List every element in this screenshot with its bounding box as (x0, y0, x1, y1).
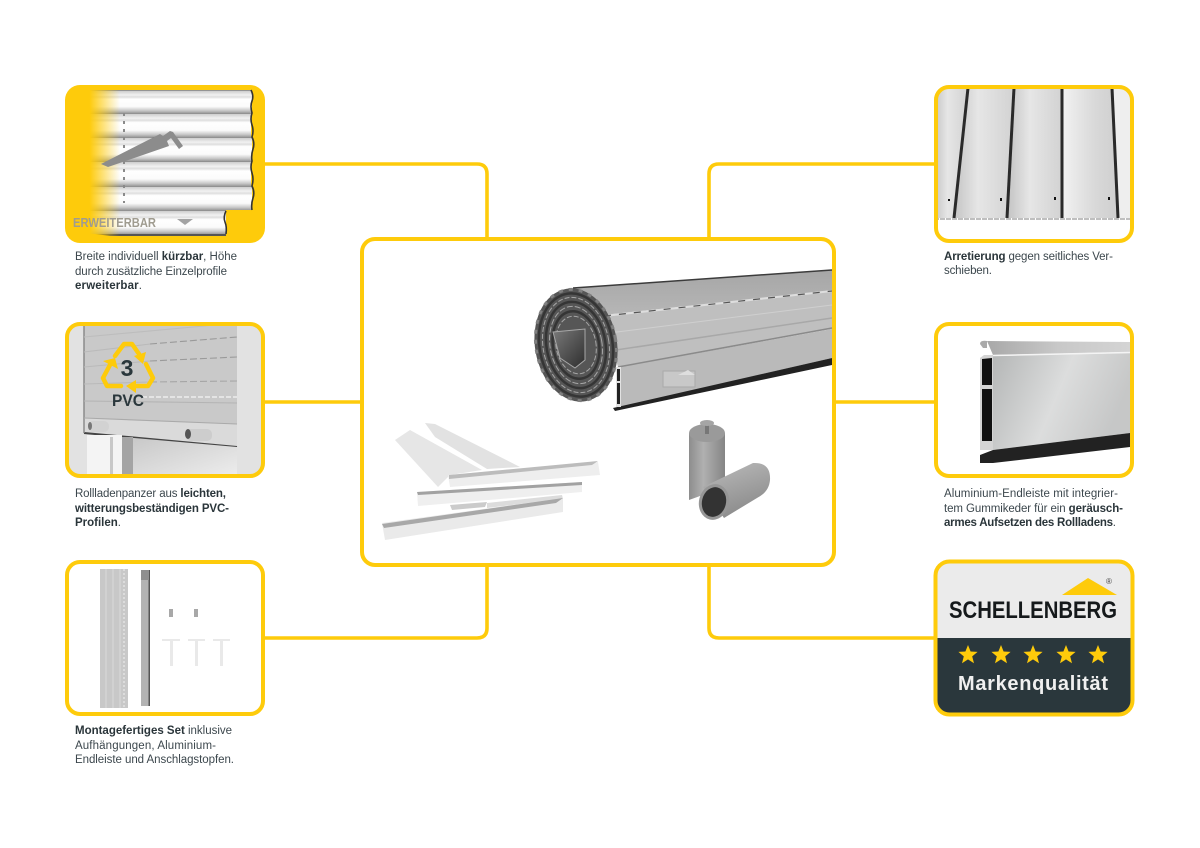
text: mounting set: Montagefertiges Set inklusive (75, 725, 232, 737)
PVC label: PVC (112, 391, 144, 410)
text: mounting set: Endleiste und Anschlagstopfen. (75, 754, 234, 766)
icon: saw (101, 131, 183, 167)
icon: down marker (177, 219, 193, 225)
brackets (382, 423, 600, 540)
text: locking: schieben. (944, 265, 992, 277)
text: locking: Arretierung gegen seitliches Ver- (944, 251, 1113, 263)
panel: mounting set (67, 562, 263, 714)
text: mounting set: Aufhängungen, Aluminium- (75, 740, 216, 752)
logo roof (1062, 578, 1117, 595)
rolled shutter (526, 270, 832, 411)
hangers (162, 639, 230, 666)
arrowheads (103, 352, 146, 393)
logo wordmark: SCHELLENBERG (949, 597, 1117, 624)
label: extendable: ERWEITERBAR (73, 216, 156, 230)
registered mark: ® (1106, 577, 1112, 586)
panel: brand quality badge (934, 560, 1134, 716)
roll end (534, 288, 618, 402)
text: cuttable width (75, 251, 237, 292)
panel: aluminium end bar (936, 324, 1132, 476)
cut line (123, 113, 125, 203)
window below (87, 435, 122, 478)
panel: product centre (362, 239, 834, 565)
text: PVC profiles: witterungsbeständigen PVC- (74, 503, 229, 515)
shutter stack (100, 569, 128, 708)
text: cuttable width: erweiterbar. (75, 280, 142, 292)
panel: locking (934, 85, 1134, 243)
slats (84, 86, 254, 241)
text: aluminium end bar: tem Gummikeder für ein geräusch- (944, 503, 1123, 515)
brand quality label: Markenqualität (958, 673, 1108, 695)
stoppers (186, 429, 212, 441)
aluminium bar (141, 570, 150, 706)
text: PVC profiles: Rollladenpanzer aus leichten, (75, 488, 226, 500)
panel: PVC profiles (65, 322, 265, 478)
text: aluminium end bar: armes Aufsetzen des Rollladens. (944, 517, 1116, 529)
number 3: 3 (121, 355, 133, 381)
text: locking (944, 251, 1113, 277)
text: mounting set (75, 725, 234, 766)
shutter curtain (84, 326, 237, 424)
connector lines (265, 164, 934, 638)
text: aluminium end bar: Aluminium-Endleiste mit integrier- (944, 488, 1118, 500)
text: cuttable width: Breite individuell kürzbar, Höhe (75, 251, 237, 263)
text: PVC profiles: Profilen. (75, 517, 121, 529)
bar (980, 341, 1130, 463)
stars (958, 645, 1108, 663)
text: aluminium end bar (944, 488, 1123, 529)
end stoppers (689, 420, 770, 523)
end stops (169, 609, 198, 617)
icon: recycling 3 (103, 344, 153, 386)
panel: cuttable width (65, 85, 265, 243)
text: PVC profiles (74, 488, 229, 529)
text: cuttable width: durch zusätzliche Einzelprofile (75, 266, 227, 278)
